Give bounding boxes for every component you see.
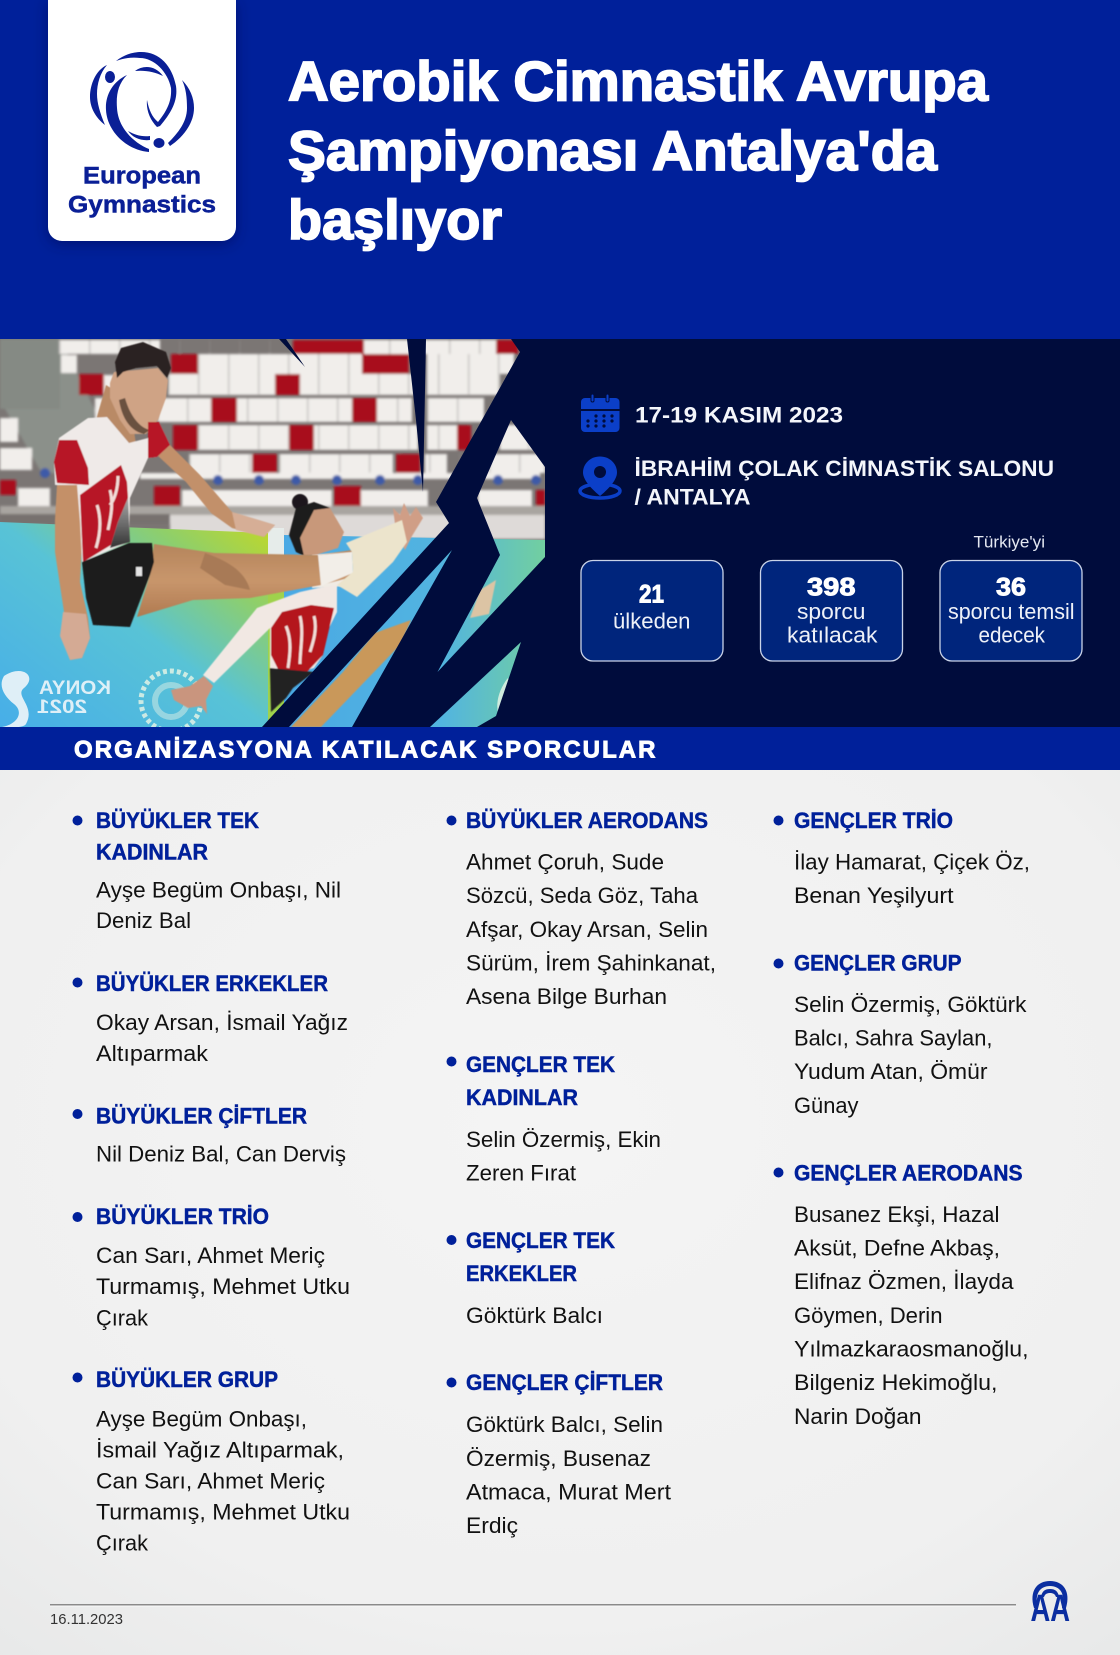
category: GENÇLER TEK KADINLAR: KADINLAR xyxy=(466,1085,578,1110)
category: GENÇLER TRİO: Benan Yeşilyurt xyxy=(794,883,954,908)
category: GENÇLER TEK KADINLAR xyxy=(446,1052,661,1186)
info row: venue xyxy=(580,456,1054,510)
category: BÜYÜKLER TRİO: BÜYÜKLER TRİO xyxy=(96,1204,269,1229)
category: BÜYÜKLER TEK KADINLAR: KADINLAR xyxy=(96,840,208,864)
category: GENÇLER TRİO: İlay Hamarat, Çiçek Öz, xyxy=(794,850,1030,874)
category: GENÇLER ÇİFTLER xyxy=(446,1370,671,1538)
category: GENÇLER GRUP xyxy=(774,950,1028,1118)
category: GENÇLER TEK ERKEKLER: Göktürk Balcı xyxy=(466,1303,603,1328)
category: GENÇLER ÇİFTLER: Özermiş, Busenaz xyxy=(466,1446,651,1471)
stat card: 21 ülkeden: 21 xyxy=(639,580,664,608)
category: GENÇLER AERODANS: Narin Doğan xyxy=(794,1404,922,1429)
section heading band xyxy=(0,727,1120,770)
icon: AA logo: AA xyxy=(1030,1588,1070,1630)
stat card: 398 sporcu katılacak xyxy=(760,560,902,661)
icon: calendar xyxy=(581,394,620,432)
category: GENÇLER ÇİFTLER: Göktürk Balcı, Selin xyxy=(466,1412,663,1437)
note: Türkiye'yi: Türkiye'yi xyxy=(974,534,1045,552)
title: Şampiyonası Antalya'da xyxy=(288,119,938,182)
category: BÜYÜKLER GRUP: Ayşe Begüm Onbaşı, xyxy=(96,1406,307,1432)
stat card: 398 sporcu katılacak: katılacak xyxy=(787,622,878,648)
female gymnast xyxy=(171,494,496,727)
advertising banners: 2021 xyxy=(37,697,87,718)
stat card: 398 sporcu katılacak: 398 xyxy=(807,574,856,602)
info row: date xyxy=(581,394,843,432)
category: BÜYÜKLER ÇİFTLER: BÜYÜKLER ÇİFTLER xyxy=(96,1104,307,1128)
category: GENÇLER AERODANS: Elifnaz Özmen, İlayda xyxy=(794,1269,1014,1294)
category: GENÇLER AERODANS: Aksüt, Defne Akbaş, xyxy=(794,1236,1000,1260)
info row: venue: İBRAHİM ÇOLAK CİMNASTİK SALONU xyxy=(634,456,1054,481)
category: GENÇLER ÇİFTLER: Atmaca, Murat Mert xyxy=(466,1480,671,1504)
navy zigzag overlay xyxy=(262,339,545,727)
category: GENÇLER AERODANS: GENÇLER AERODANS xyxy=(794,1160,1022,1186)
category: BÜYÜKLER AERODANS: Afşar, Okay Arsan, Selin xyxy=(466,917,708,942)
stat card: 398 sporcu katılacak: sporcu xyxy=(797,599,866,624)
header panel xyxy=(0,0,1120,339)
logo card: European Gymnastics: European xyxy=(83,162,201,190)
title xyxy=(288,50,989,251)
category: GENÇLER TEK ERKEKLER xyxy=(446,1228,615,1328)
category: GENÇLER TEK KADINLAR: GENÇLER TEK xyxy=(466,1052,615,1077)
category: GENÇLER ÇİFTLER: GENÇLER ÇİFTLER xyxy=(466,1370,663,1395)
category: BÜYÜKLER GRUP: Çırak xyxy=(96,1530,149,1556)
category: BÜYÜKLER TEK KADINLAR: Ayşe Begüm Onbaşı, Nil xyxy=(96,878,341,902)
category: BÜYÜKLER AERODANS xyxy=(446,808,716,1009)
photo: gymnasts in the arena xyxy=(0,339,545,731)
background paper xyxy=(0,770,1120,1655)
category: BÜYÜKLER GRUP: Turmamış, Mehmet Utku xyxy=(96,1500,350,1524)
category: BÜYÜKLER ERKEKLER: Altıparmak xyxy=(96,1041,209,1066)
category: GENÇLER GRUP: Yudum Atan, Ömür xyxy=(794,1059,988,1084)
advertising banners xyxy=(0,522,545,731)
category: BÜYÜKLER AERODANS: BÜYÜKLER AERODANS xyxy=(466,808,708,833)
category: GENÇLER TEK KADINLAR: Zeren Fırat xyxy=(466,1160,576,1186)
category: BÜYÜKLER ERKEKLER: Okay Arsan, İsmail Yağız xyxy=(96,1010,348,1035)
category: BÜYÜKLER GRUP xyxy=(72,1367,350,1556)
stat card: 36 sporcu temsil edecek: edecek xyxy=(978,622,1046,648)
title: Aerobik Cimnastik Avrupa xyxy=(288,50,989,112)
category: GENÇLER TRİO xyxy=(774,808,1030,908)
advertising banners: KONYA xyxy=(39,678,111,699)
category: BÜYÜKLER TEK KADINLAR xyxy=(72,808,341,933)
stat card: 36 sporcu temsil edecek: sporcu temsil xyxy=(948,599,1074,624)
logo card: European Gymnastics: Gymnastics xyxy=(68,192,216,218)
category: GENÇLER GRUP: GENÇLER GRUP xyxy=(794,950,962,976)
category: BÜYÜKLER ÇİFTLER xyxy=(72,1104,346,1166)
category: BÜYÜKLER TRİO: Turmamış, Mehmet Utku xyxy=(96,1274,350,1299)
category: GENÇLER TEK ERKEKLER: GENÇLER TEK xyxy=(466,1228,615,1253)
category: GENÇLER TEK ERKEKLER: ERKEKLER xyxy=(466,1261,577,1286)
footer rule and date: 16.11.2023 xyxy=(50,1611,123,1628)
icon: location pin xyxy=(580,456,620,498)
stat card: 21 ülkeden xyxy=(581,560,723,661)
category: BÜYÜKLER TRİO xyxy=(72,1204,350,1330)
category: BÜYÜKLER AERODANS: Asena Bilge Burhan xyxy=(466,984,667,1009)
category: GENÇLER ÇİFTLER: Erdiç xyxy=(466,1513,518,1538)
section heading band: ORGANİZASYONA KATILACAK SPORCULAR xyxy=(74,736,656,764)
category: GENÇLER AERODANS xyxy=(774,1160,1028,1429)
category: BÜYÜKLER AERODANS: Sözcü, Seda Göz, Taha xyxy=(466,883,699,908)
info row: venue: / ANTALYA xyxy=(634,484,750,510)
stat card: 21 ülkeden: ülkeden xyxy=(613,608,690,634)
category: BÜYÜKLER GRUP: BÜYÜKLER GRUP xyxy=(96,1367,278,1392)
logo card: European Gymnastics xyxy=(48,0,236,241)
category: GENÇLER TEK KADINLAR: Selin Özermiş, Ekin xyxy=(466,1127,661,1152)
category: BÜYÜKLER ERKEKLER: BÜYÜKLER ERKEKLER xyxy=(96,971,328,996)
category: GENÇLER AERODANS: Göymen, Derin xyxy=(794,1303,942,1328)
info panel background xyxy=(545,339,1120,727)
category: GENÇLER GRUP: Balcı, Sahra Saylan, xyxy=(794,1026,992,1050)
category: BÜYÜKLER AERODANS: Ahmet Çoruh, Sude xyxy=(466,850,664,874)
title: başlıyor xyxy=(288,188,502,251)
category: GENÇLER AERODANS: Busanez Ekşi, Hazal xyxy=(794,1202,1000,1227)
category: GENÇLER TRİO: GENÇLER TRİO xyxy=(794,808,953,833)
category: BÜYÜKLER ERKEKLER xyxy=(72,971,348,1066)
category: BÜYÜKLER ÇİFTLER: Nil Deniz Bal, Can Derviş xyxy=(96,1142,346,1166)
icon: AA logo xyxy=(1030,1581,1070,1630)
category: BÜYÜKLER TRİO: Can Sarı, Ahmet Meriç xyxy=(96,1243,325,1268)
category: BÜYÜKLER GRUP: İsmail Yağız Altıparmak, xyxy=(96,1438,344,1462)
category: BÜYÜKLER TEK KADINLAR: Deniz Bal xyxy=(96,908,191,933)
category: GENÇLER AERODANS: Bilgeniz Hekimoğlu, xyxy=(794,1370,998,1395)
category: GENÇLER AERODANS: Yılmazkaraosmanoğlu, xyxy=(794,1336,1028,1362)
category: BÜYÜKLER TRİO: Çırak xyxy=(96,1306,149,1330)
info row: date: 17-19 KASIM 2023 xyxy=(635,402,843,428)
male gymnast xyxy=(54,342,407,660)
category: BÜYÜKLER GRUP: Can Sarı, Ahmet Meriç xyxy=(96,1468,325,1494)
category: BÜYÜKLER TEK KADINLAR: BÜYÜKLER TEK xyxy=(96,808,259,833)
category: BÜYÜKLER AERODANS: Sürüm, İrem Şahinkanat, xyxy=(466,950,716,976)
category: GENÇLER GRUP: Günay xyxy=(794,1093,858,1118)
category: GENÇLER GRUP: Selin Özermiş, Göktürk xyxy=(794,992,1028,1017)
stat card: 36 sporcu temsil edecek: 36 xyxy=(996,574,1026,602)
stat card: 36 sporcu temsil edecek xyxy=(940,560,1082,661)
